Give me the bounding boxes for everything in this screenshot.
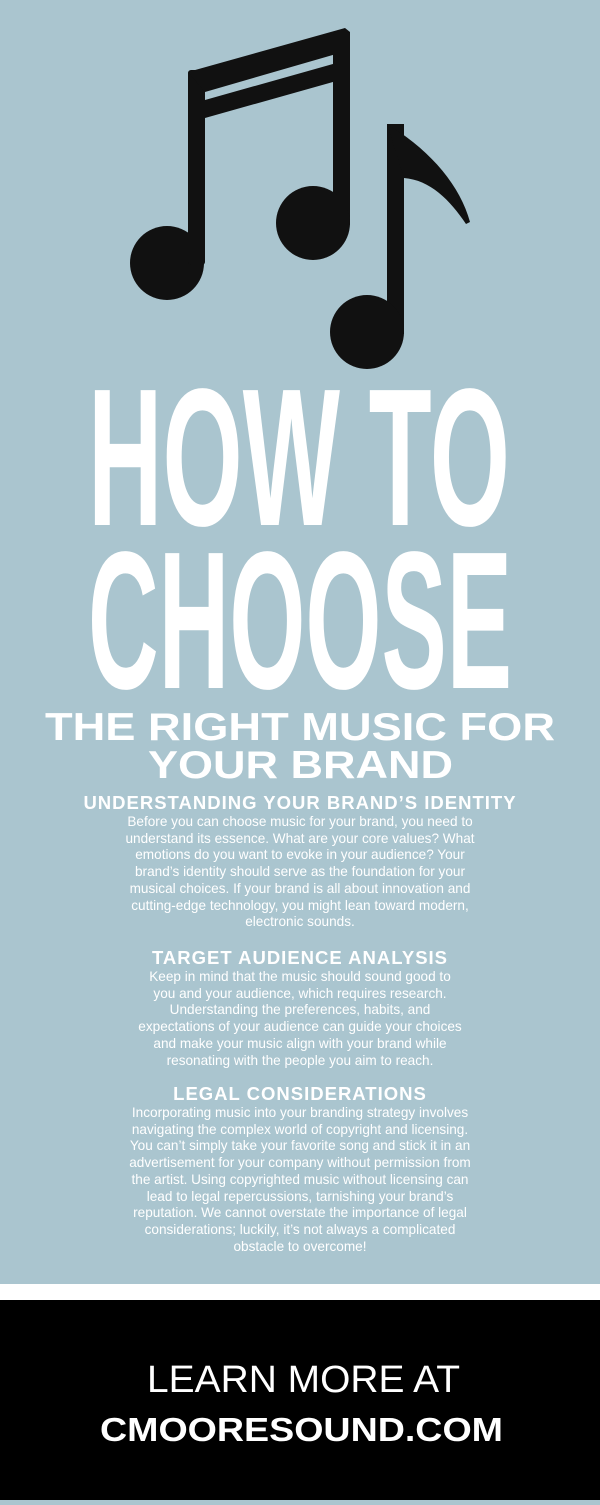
text: brand identity: brand’s identity should serve as the foundation for your bbox=[135, 864, 465, 879]
heading: legal: LEGAL CONSIDERATIONS bbox=[173, 1083, 427, 1104]
icon: music notes bbox=[130, 28, 470, 369]
text: brand identity: understand its essence. What are your core values? What bbox=[125, 831, 475, 846]
text: legal: Incorporating music into your branding strategy involves bbox=[132, 1105, 468, 1120]
section: legal bbox=[129, 1083, 471, 1254]
text: brand identity: Before you can choose music for your brand, you need to bbox=[127, 814, 473, 829]
text: legal: advertisement for your company without permission from bbox=[129, 1155, 471, 1170]
text: target audience: Keep in mind that the music should sound good to bbox=[149, 969, 451, 984]
text: brand identity: electronic sounds. bbox=[245, 914, 355, 929]
heading: brand identity: UNDERSTANDING YOUR BRAND’S IDENTITY bbox=[83, 792, 517, 813]
text: brand identity bbox=[125, 814, 475, 929]
text: brand identity: musical choices. If your brand is all about innovation and bbox=[130, 881, 470, 896]
text: legal: lead to legal repercussions, tarnishing your brand’s bbox=[147, 1189, 453, 1204]
text: target audience: and make your music align with your brand while bbox=[153, 1036, 447, 1051]
heading: target audience: TARGET AUDIENCE ANALYSIS bbox=[152, 947, 448, 968]
text: legal: considerations; luckily, it’s not always a complicated bbox=[145, 1222, 455, 1237]
text: target audience: Understanding the preferences, habits, and bbox=[170, 1002, 430, 1017]
footer bbox=[0, 1300, 600, 1500]
text: legal: You can’t simply take your favorite song and stick it in an bbox=[130, 1138, 470, 1153]
section: brand identity bbox=[83, 792, 517, 929]
section: target audience bbox=[138, 947, 462, 1068]
text: target audience: expectations of your audience can guide your choices bbox=[138, 1019, 462, 1034]
title: THE RIGHT MUSIC FOR bbox=[45, 706, 555, 749]
footer text: CMOORESOUND.COM bbox=[100, 1411, 503, 1448]
text: brand identity: emotions do you want to evoke in your audience? Your bbox=[135, 847, 465, 862]
white divider band bbox=[0, 1284, 600, 1300]
text: target audience: you and your audience, which requires research. bbox=[153, 986, 447, 1001]
footer text: LEARN MORE AT bbox=[147, 1359, 460, 1401]
text: target audience: resonating with the people you aim to reach. bbox=[167, 1053, 433, 1068]
text: legal: the artist. Using copyrighted music without licensing can bbox=[132, 1172, 468, 1187]
footer text bbox=[100, 1359, 503, 1448]
text: legal: reputation. We cannot overstate the importance of legal bbox=[133, 1205, 467, 1220]
text: legal bbox=[129, 1105, 471, 1254]
text: target audience bbox=[138, 969, 462, 1068]
text: legal: obstacle to overcome! bbox=[234, 1239, 366, 1254]
text: brand identity: cutting-edge technology, you might lean toward modern, bbox=[131, 898, 469, 913]
title bbox=[45, 380, 555, 780]
text: legal: navigating the complex world of copyright and licensing. bbox=[132, 1122, 468, 1137]
